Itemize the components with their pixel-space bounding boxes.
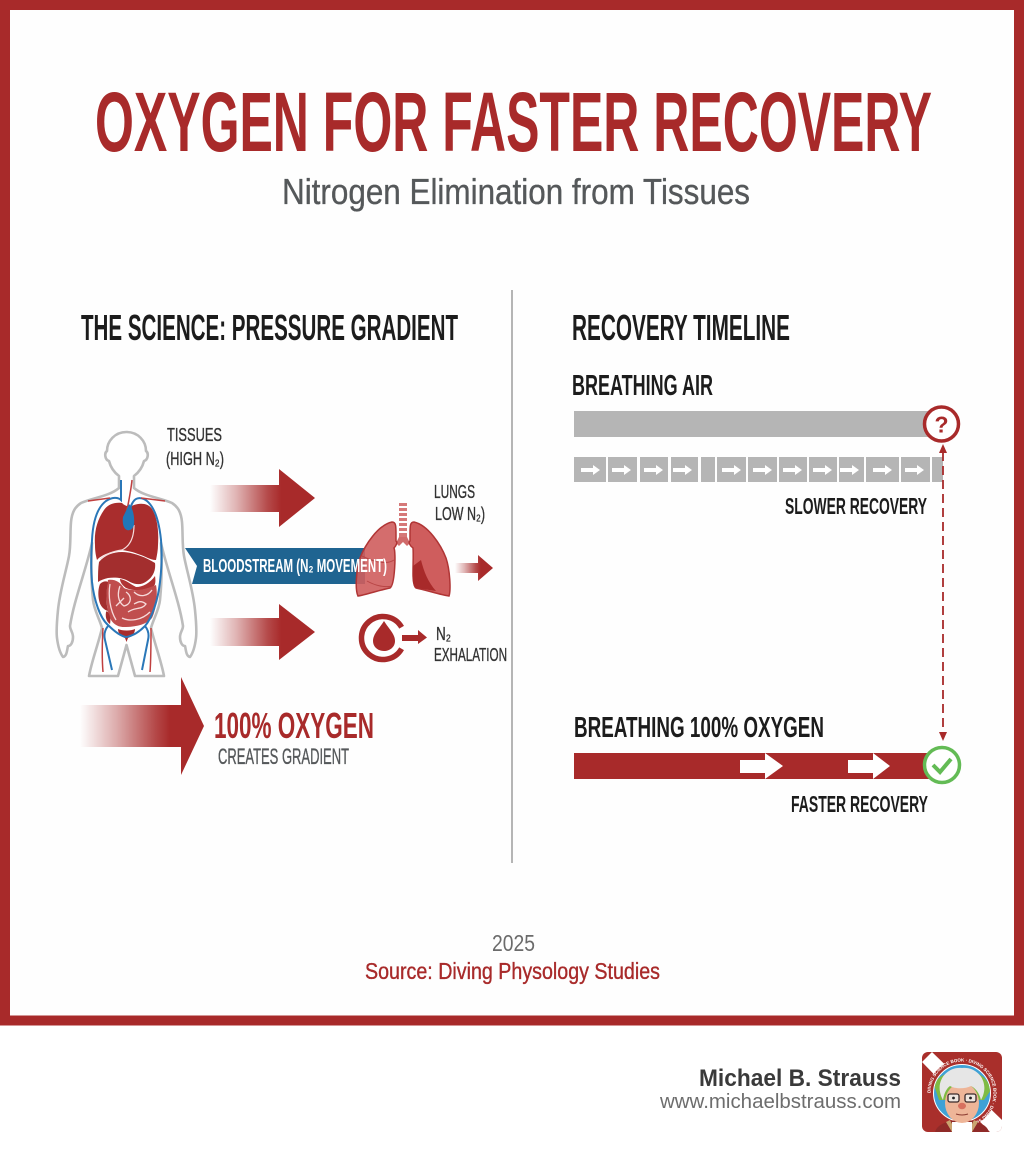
red vessels [88, 480, 165, 672]
left lobe line [362, 556, 394, 587]
arrow: upper tissue [210, 469, 315, 527]
bladder [118, 629, 135, 642]
right lung lobe [412, 560, 436, 591]
panel: recovery timeline [572, 307, 960, 817]
icon: human body with organs [57, 432, 196, 676]
arrow [402, 630, 427, 644]
subtitle: Nitrogen Elimination from Tissues [282, 171, 750, 212]
left lung [356, 522, 397, 596]
logo: DIVING SCIENCE BOOK · DIVING SCIENCE BOOK · DIVING SCIENCE [927, 1058, 997, 1123]
heading: recovery timeline: RECOVERY TIMELINE [572, 307, 790, 348]
label: creates gradient: CREATES GRADIENT [218, 744, 349, 769]
bar: air [574, 411, 930, 437]
trachea [399, 503, 407, 537]
label: lungs: LUNGS [434, 482, 475, 502]
lower colon [106, 611, 110, 624]
right lung [409, 522, 450, 596]
arrow: lungs out [455, 555, 493, 581]
body outline [57, 432, 196, 676]
label: N2: N₂ [436, 624, 451, 644]
liver [98, 552, 155, 584]
label: slower recovery: SLOWER RECOVERY [785, 493, 927, 519]
label: tissues: TISSUES [167, 425, 222, 445]
year: 2025 [492, 930, 535, 956]
upper chest organs [95, 503, 158, 560]
label: breathing air: BREATHING AIR [572, 370, 713, 402]
label: faster recovery: FASTER RECOVERY [791, 791, 928, 817]
icon: question mark: ? [934, 412, 949, 438]
bronchi [396, 537, 410, 546]
dashed connector [939, 444, 947, 741]
heading: the science: THE SCIENCE: PRESSURE GRADIENT [81, 307, 458, 348]
stomach band [120, 576, 155, 590]
arrow: oxygen one [740, 753, 783, 779]
label: low N2: LOW N₂) [435, 504, 485, 524]
label: exhalation: EXHALATION [434, 645, 507, 665]
label: high N2: (HIGH N₂) [166, 449, 224, 469]
website: www.michaelbstrauss.com [659, 1091, 901, 1113]
icon: check mark [924, 748, 960, 782]
ring [361, 616, 402, 660]
panel: the science [57, 307, 507, 775]
heart [123, 504, 134, 530]
blue vessels [91, 480, 162, 670]
source: Source: Diving Physology Studies [365, 958, 660, 984]
arrow: lower tissue [210, 604, 315, 660]
segmented bar: air [574, 457, 943, 482]
arrow: oxygen two [848, 753, 890, 779]
icon: lungs [356, 503, 450, 596]
left colon [98, 581, 108, 611]
arrow: 100% oxygen [80, 677, 204, 775]
footer credit [659, 1065, 901, 1113]
drop [373, 621, 395, 651]
banner: bloodstream [185, 548, 365, 584]
icon: question mark [924, 407, 958, 441]
bar: oxygen [574, 753, 936, 779]
author name: Michael B. Strauss [699, 1065, 901, 1092]
label: 100% oxygen: 100% OXYGEN [214, 705, 374, 746]
label: bloodstream: BLOODSTREAM (N₂ MOVEMENT) [203, 555, 387, 576]
central divider [511, 290, 513, 863]
icon: blood drop exhalation [361, 616, 427, 660]
intestines [106, 580, 157, 627]
label: breathing 100% oxygen: BREATHING 100% OXYGEN [574, 712, 824, 744]
